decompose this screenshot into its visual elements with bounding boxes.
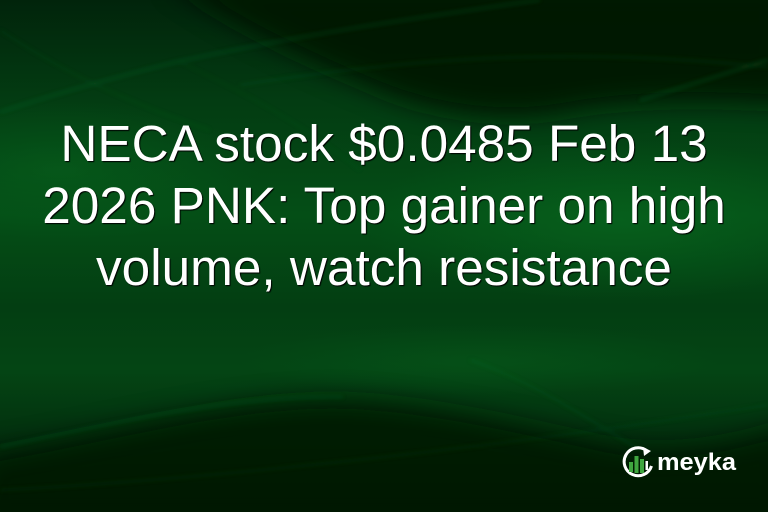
logo: meyka xyxy=(622,446,737,478)
title xyxy=(42,115,726,296)
icon: ring with green bars xyxy=(624,447,652,476)
wordmark: meyka xyxy=(657,449,737,476)
title: 2026 PNK: Top gainer on high xyxy=(42,177,726,234)
title: volume, watch resistance xyxy=(96,239,672,296)
title: NECA stock $0.0485 Feb 13 xyxy=(60,115,708,172)
